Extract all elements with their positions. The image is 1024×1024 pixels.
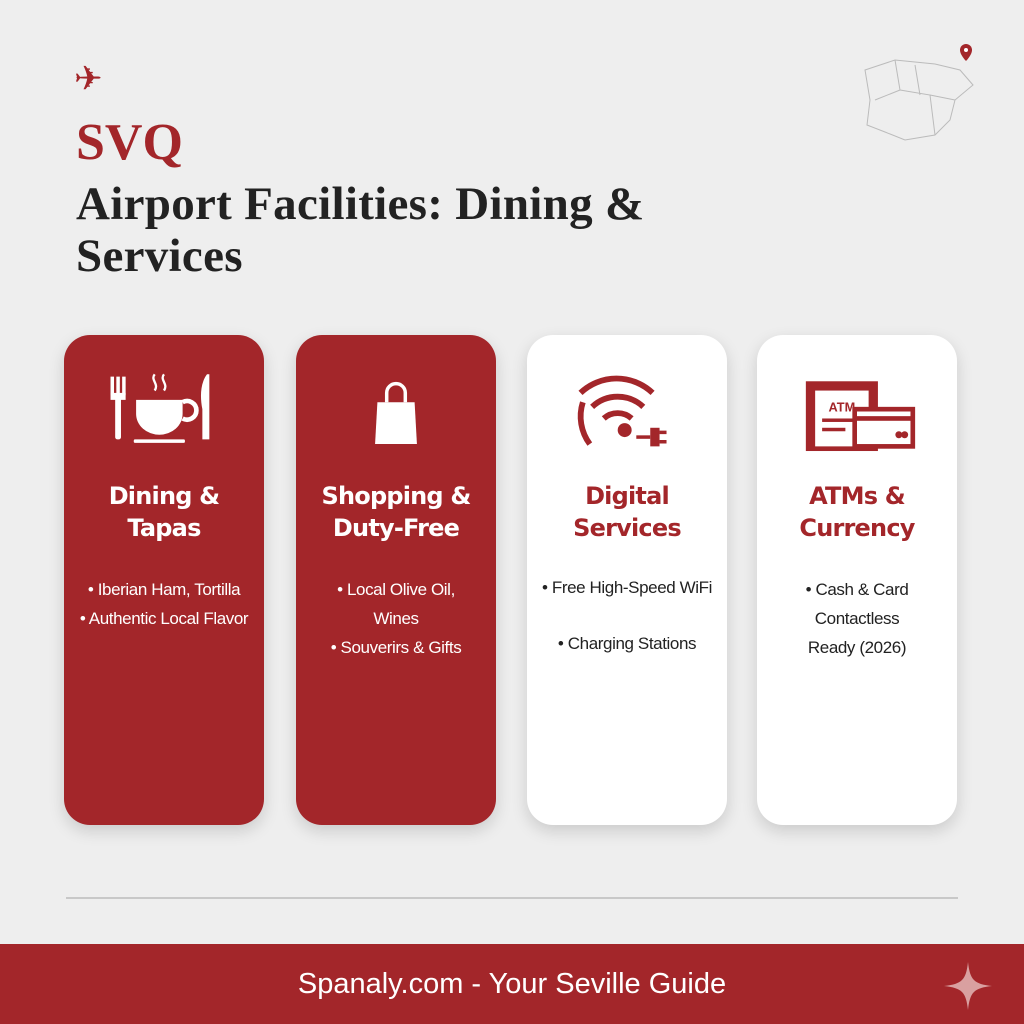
icon: plane: ✈ (74, 60, 102, 98)
panel: atm (757, 335, 957, 825)
icon: bag (375, 382, 417, 444)
list: • Free High-Speed WiFi (542, 578, 712, 597)
list: • Souverirs & Gifts (331, 638, 461, 657)
list (80, 580, 248, 628)
heading (799, 482, 915, 542)
list: • Cash & Card (806, 580, 908, 599)
heading: ATMs & (809, 482, 905, 510)
icon: atm card: ATM (829, 399, 855, 414)
panel: dining (64, 335, 264, 825)
heading: Currency (799, 514, 915, 542)
list (331, 580, 462, 657)
list: Contactless (815, 609, 899, 628)
icon: cutlery cup (110, 374, 210, 443)
title: Services (76, 230, 243, 282)
heading: Dining & (109, 482, 219, 510)
icon: wifi plug (578, 376, 667, 446)
title: Airport Facilities: Dining & (76, 178, 644, 230)
heading (573, 482, 681, 542)
heading: Services (573, 514, 681, 542)
list: • Local Olive Oil, (337, 580, 455, 599)
list: • Iberian Ham, Tortilla (88, 580, 240, 599)
heading (322, 482, 470, 542)
title: SVQ (76, 114, 183, 171)
icon: sparkle (944, 962, 992, 1010)
icon: spain map (864, 44, 974, 140)
list: • Authentic Local Flavor (80, 609, 248, 628)
footer (0, 944, 1024, 1024)
heading: Duty-Free (333, 514, 459, 542)
panel: digital (527, 335, 727, 825)
heading: Shopping & (322, 482, 470, 510)
footer: Spanaly.com - Your Seville Guide (298, 968, 726, 1000)
heading (109, 482, 219, 542)
list (542, 578, 712, 653)
list: Ready (2026) (808, 638, 906, 657)
panel: shopping (296, 335, 496, 825)
list: Wines (373, 609, 419, 628)
heading: Tapas (127, 514, 201, 542)
list (806, 580, 908, 657)
title (76, 114, 644, 282)
heading: Digital (585, 482, 669, 510)
list: • Charging Stations (558, 634, 696, 653)
icon: atm card (806, 381, 916, 452)
